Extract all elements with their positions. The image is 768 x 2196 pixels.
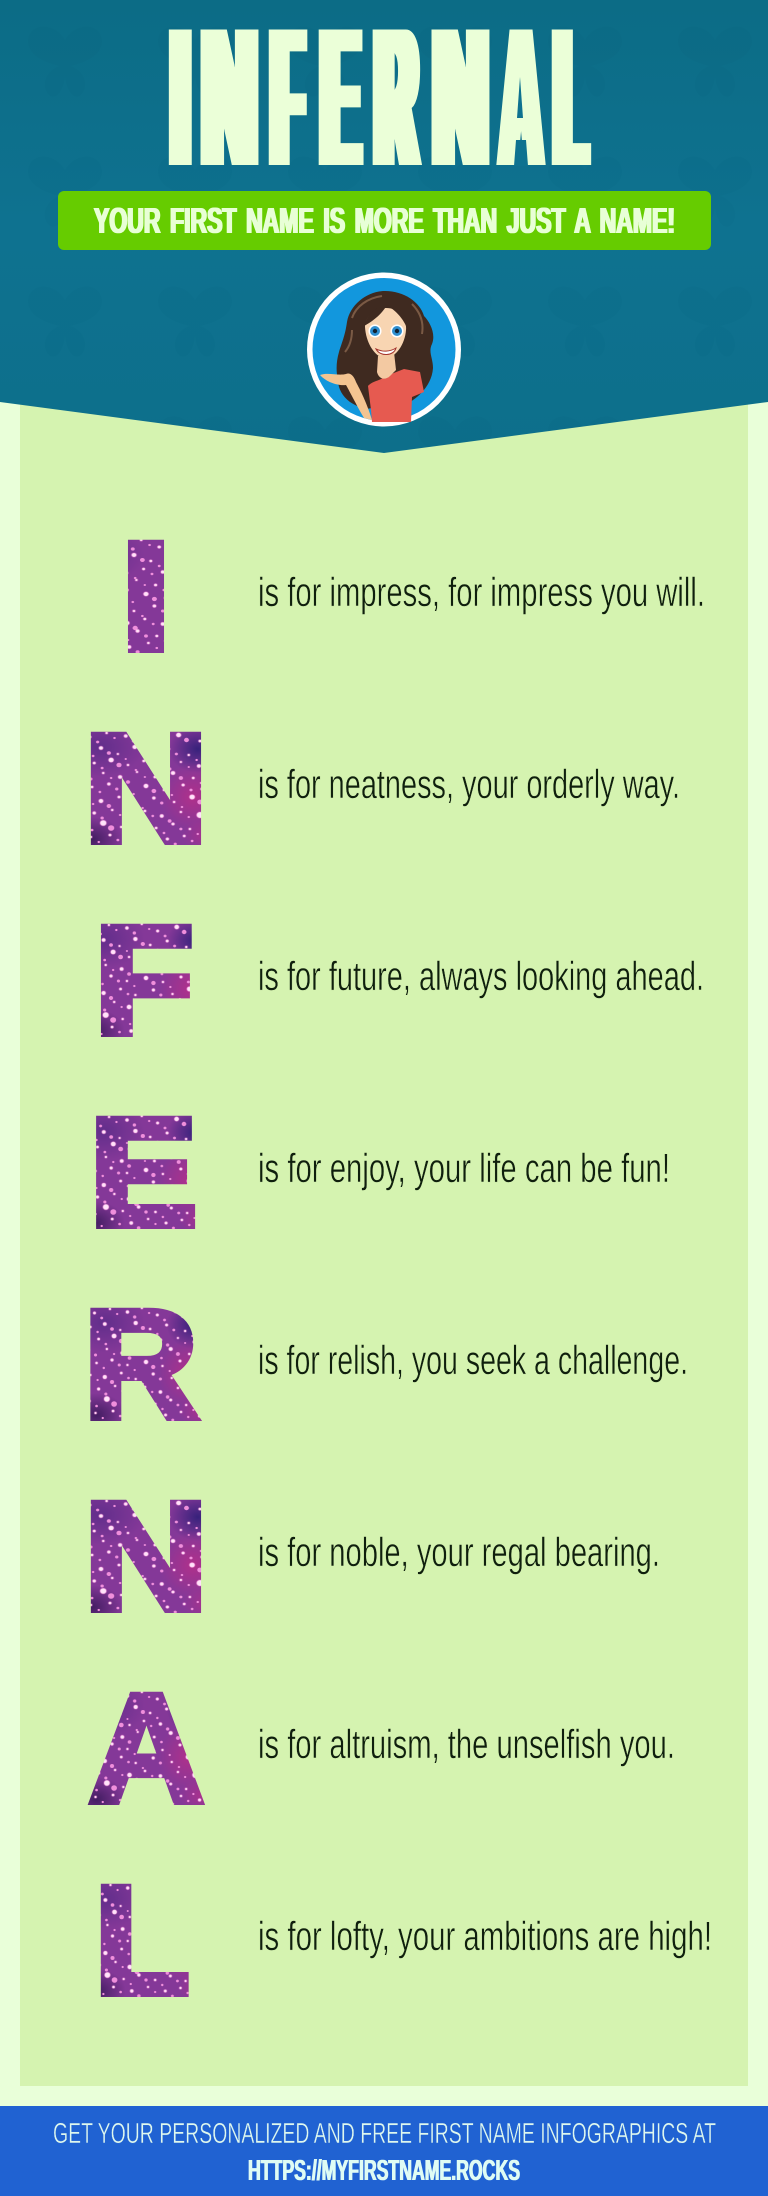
letter F: F (94, 895, 193, 1066)
tagline bar (58, 191, 711, 250)
icon: avatar portrait (307, 272, 461, 426)
row 5: letter R (84, 1278, 688, 1450)
letter R: R (84, 1278, 198, 1450)
row 3: letter F (94, 895, 704, 1066)
title letter A counter and leg gap (514, 77, 528, 166)
header butterfly texture (0, 0, 768, 453)
header banner (0, 0, 768, 453)
row 1: letter I (120, 510, 705, 682)
letter L: L (95, 1854, 189, 2026)
footer url: HTTPS://MYFIRSTNAME.ROCKS (248, 2155, 520, 2187)
row 8: letter L (95, 1854, 712, 2026)
header background chevron (0, 0, 768, 453)
panel: letter list background (20, 400, 748, 2086)
letter N: N (84, 703, 208, 874)
letter I: I (120, 510, 172, 682)
letter E: E (90, 1088, 197, 1258)
row 2: letter N (84, 703, 680, 874)
footer background (0, 2106, 768, 2196)
row 7: letter A (90, 1662, 675, 1834)
footer banner (0, 2106, 768, 2196)
row 6: letter N (84, 1471, 660, 1642)
letter A: A (90, 1662, 203, 1834)
letter N: N (84, 1471, 208, 1642)
row 4: letter E (90, 1088, 670, 1258)
